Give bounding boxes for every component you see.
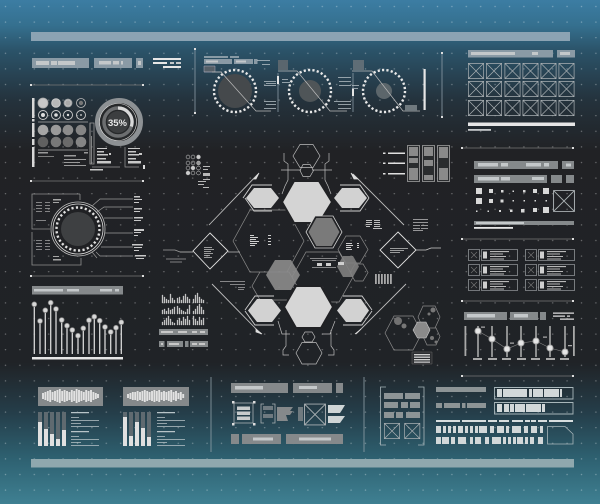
small tag bbox=[405, 105, 417, 111]
cluster caption bbox=[412, 352, 432, 364]
translucent hexagon right bbox=[337, 256, 359, 277]
equalizer 1 bbox=[38, 412, 66, 446]
large bottom hexagon bbox=[284, 286, 333, 328]
line row bbox=[436, 420, 573, 422]
divider: upper left bbox=[31, 85, 143, 181]
central hexagon network bbox=[163, 144, 441, 364]
left link bbox=[163, 250, 193, 262]
side bars bbox=[32, 98, 34, 167]
panel: vertical level bars bbox=[383, 146, 450, 182]
dial 3 bbox=[352, 60, 420, 112]
matrix squares bbox=[476, 188, 549, 213]
top brackets bbox=[281, 153, 332, 194]
panel: bottom center controls bbox=[211, 377, 364, 452]
scanner frame bbox=[32, 194, 81, 265]
divider dots bbox=[30, 275, 144, 277]
separators and captions bbox=[38, 122, 90, 164]
matrix placeholder box bbox=[554, 191, 574, 211]
panel: mini bar charts bbox=[159, 293, 208, 347]
small bars bbox=[436, 387, 486, 408]
grid header bbox=[468, 50, 553, 58]
waveform 2 bbox=[123, 387, 189, 406]
vertical rules bbox=[211, 377, 364, 452]
footer bars bbox=[231, 434, 239, 444]
panel: bottom right controls bbox=[380, 387, 573, 445]
slider header bars bbox=[464, 312, 507, 320]
slider labels bbox=[473, 326, 572, 360]
top banner bar bbox=[31, 32, 570, 41]
placeholder boxes bbox=[468, 63, 574, 116]
equalizer text bbox=[71, 412, 185, 446]
bracket button rows bbox=[384, 393, 420, 418]
text lines center bbox=[220, 258, 337, 290]
hexagon cluster bbox=[385, 306, 440, 364]
panel: waveforms and equalizers bbox=[38, 387, 189, 446]
vertical rules bbox=[195, 48, 442, 117]
bottom banner bar bbox=[31, 459, 574, 468]
header bars bbox=[231, 383, 288, 393]
level lines bbox=[383, 152, 405, 174]
waveform 1 bbox=[38, 387, 103, 406]
panel: square matrix bbox=[474, 161, 574, 229]
corner hexagon: bottom right bbox=[337, 299, 369, 322]
equalizer 2 bbox=[123, 412, 151, 446]
mini chart bars bbox=[159, 329, 208, 335]
filled circle buttons bbox=[38, 125, 86, 147]
dial header bars bbox=[204, 56, 258, 64]
list icon bbox=[232, 401, 256, 426]
panel: X placeholder grid bbox=[468, 50, 575, 131]
cut corner box bbox=[548, 426, 573, 444]
dial indicator bars bbox=[277, 69, 426, 110]
panel: three radar dials bbox=[194, 48, 443, 118]
placeholder box bbox=[305, 404, 325, 425]
scanner dial bbox=[51, 202, 105, 256]
top outline hexagons bbox=[293, 144, 320, 176]
lollipop heads bbox=[32, 300, 124, 338]
bottom outline hexagons bbox=[296, 332, 322, 364]
panel: six thumbnail rows bbox=[468, 250, 574, 290]
gauge captions bbox=[90, 148, 142, 170]
small circle grid bbox=[186, 155, 200, 175]
white tab shapes bbox=[328, 405, 345, 423]
matrix footer bars bbox=[474, 221, 574, 225]
right diamond bbox=[380, 232, 441, 268]
bracket icon bbox=[261, 404, 275, 423]
corner hexagon: top left bbox=[246, 188, 279, 208]
lollipop baseline bbox=[32, 357, 123, 360]
bracket placeholder boxes bbox=[384, 423, 400, 439]
grid footer bars bbox=[468, 122, 575, 126]
data blocks bbox=[436, 426, 543, 444]
dial 1 bbox=[204, 66, 271, 112]
mini bars bbox=[162, 293, 204, 325]
rule end caps bbox=[194, 48, 443, 118]
corner hexagon: top right bbox=[334, 188, 367, 208]
content layer bbox=[30, 32, 575, 468]
gray hexagon bbox=[306, 216, 342, 248]
scanner callout lines bbox=[92, 199, 133, 258]
corner hexagon: bottom left bbox=[248, 299, 281, 322]
divider end dots bbox=[30, 84, 144, 182]
header strip: top left bbox=[32, 58, 181, 68]
panel: sliders bbox=[464, 312, 575, 360]
divider: right bbox=[462, 148, 573, 376]
divider dots bbox=[461, 147, 574, 377]
slider tracks bbox=[478, 326, 565, 357]
scanner labels bbox=[132, 196, 146, 259]
diagonal connectors bbox=[209, 174, 406, 334]
matrix header bars bbox=[474, 161, 558, 169]
scanner side text bbox=[36, 199, 61, 260]
slider connector bbox=[478, 331, 565, 352]
striped block bbox=[375, 274, 392, 284]
divider: left middle bbox=[31, 275, 143, 277]
corner hexagon outlines bbox=[243, 185, 372, 325]
small text block bbox=[198, 166, 210, 188]
striped tag icon bbox=[277, 407, 293, 421]
dial 2 bbox=[278, 60, 347, 112]
level columns bbox=[408, 146, 450, 182]
small tag icon bbox=[298, 407, 303, 421]
bottom brackets bbox=[278, 321, 335, 355]
translucent hexagon left bbox=[266, 260, 300, 290]
slider knobs bbox=[475, 328, 568, 355]
hexagon text blocks bbox=[250, 235, 359, 266]
dial data lines bbox=[257, 60, 359, 109]
panel: circular scanner bbox=[32, 194, 146, 265]
bracket for gauge bbox=[90, 123, 94, 164]
large top hexagon bbox=[282, 181, 332, 223]
diagonal tips bbox=[254, 173, 361, 334]
bracket placeholder boxes 2 bbox=[405, 423, 420, 439]
outlined circle buttons bbox=[38, 98, 86, 120]
panel: lollipop chart bbox=[32, 286, 124, 360]
lollipop stems bbox=[34, 303, 121, 354]
bracket frame bbox=[380, 387, 424, 445]
text lines right bbox=[366, 219, 428, 231]
left diamond bbox=[180, 233, 240, 269]
outline hexagons bbox=[233, 210, 368, 302]
segmented boxes bbox=[494, 388, 573, 414]
gauge value: 35% bbox=[108, 118, 128, 129]
slider side scales bbox=[464, 326, 575, 356]
lollipop header bbox=[32, 286, 123, 294]
panel: gauge and button circles bbox=[32, 98, 145, 170]
